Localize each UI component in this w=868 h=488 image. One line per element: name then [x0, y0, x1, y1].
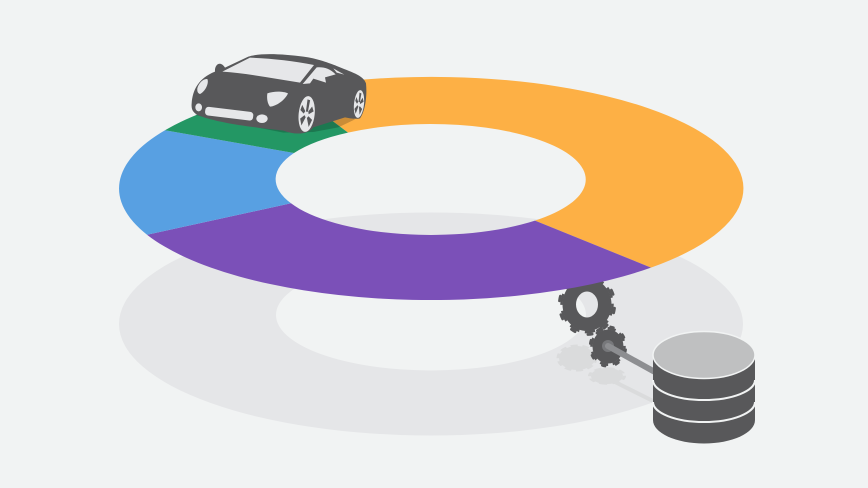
segment: orange: [290, 77, 743, 268]
car ground shadow: [195, 107, 355, 133]
donut chart: [119, 77, 743, 300]
side window: [303, 67, 336, 84]
segment: blue: [119, 130, 294, 235]
front grille: [205, 106, 254, 121]
segment: green: [165, 89, 348, 153]
database body: [653, 355, 755, 443]
database top: [653, 332, 755, 378]
windshield: [222, 58, 314, 83]
large gear: [559, 274, 615, 335]
left headlight: [197, 79, 208, 94]
rear wheel: [353, 90, 365, 118]
gear shadows and axle shadow: [558, 345, 653, 401]
front wheel: [297, 95, 317, 133]
rear window: [333, 68, 344, 75]
ring shadow: [119, 213, 743, 436]
icon: sports car: [192, 54, 366, 134]
car body: [192, 54, 366, 134]
small gear: [590, 326, 626, 367]
axle connecting gear to database: [602, 340, 654, 372]
segment: purple: [147, 203, 651, 300]
fog lights: [195, 103, 268, 123]
icon: database: [653, 332, 755, 443]
database separators: [653, 380, 755, 422]
right headlight: [267, 92, 288, 107]
